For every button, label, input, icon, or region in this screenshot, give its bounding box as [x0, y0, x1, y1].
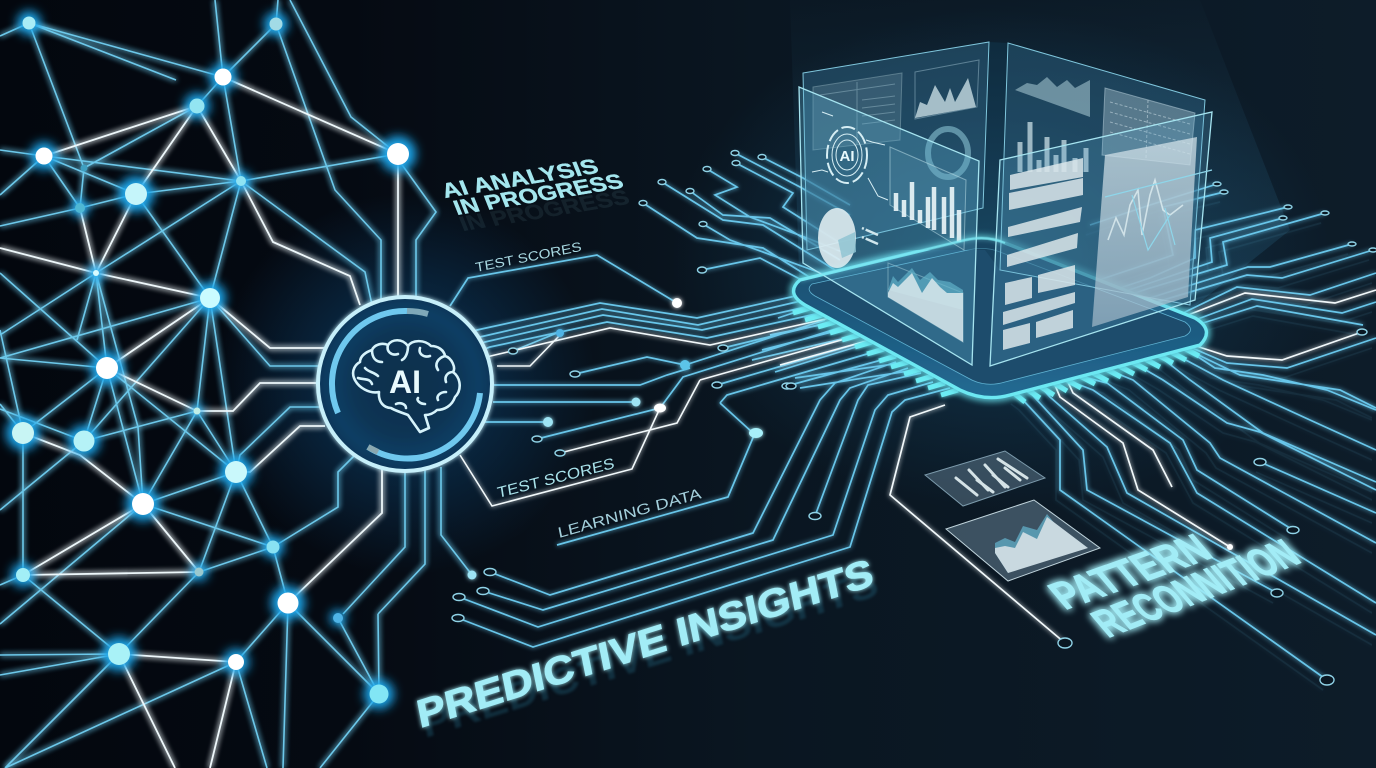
- label: predictive insights: [413, 551, 882, 747]
- lower area chart: [888, 263, 963, 342]
- network node halos: [6, 11, 416, 709]
- hub glow: [215, 194, 595, 574]
- left bundle white traces: [460, 318, 870, 506]
- label: test scores upper: TEST SCORES: [474, 239, 583, 275]
- central chip: [793, 238, 1206, 402]
- bar chart board: [925, 451, 1045, 506]
- AI brain hub: [318, 297, 492, 471]
- predictive insights glow text: PREDICTIVE INSIGHTS: [413, 551, 877, 737]
- pattern word: PATTERN: [1039, 526, 1221, 618]
- network nodes: [12, 16, 409, 704]
- AI gauge: [812, 112, 888, 200]
- gauge AI label: AI: [840, 148, 854, 165]
- recognition word: RECONNITION: [1082, 531, 1309, 646]
- heading reflection: IN PROGRESS: [456, 186, 633, 236]
- area chart: [1015, 77, 1090, 117]
- left bundle traces: [448, 153, 950, 647]
- network edges white: [0, 77, 398, 768]
- brain icon: [353, 340, 460, 432]
- trace end dots: [468, 298, 1233, 580]
- large data block: [1092, 137, 1197, 327]
- label: pattern recognition: [1039, 526, 1309, 646]
- data table: [1102, 88, 1195, 165]
- label: learning data: LEARNING DATA: [556, 485, 703, 542]
- hub disc: [318, 297, 492, 471]
- bar chart: [1020, 122, 1086, 172]
- legend: [862, 228, 878, 244]
- area chart: [915, 60, 979, 119]
- label: test scores lower: TEST SCORES: [496, 455, 616, 502]
- right white traces: [890, 290, 1376, 643]
- hollow trace terminals: [452, 150, 1376, 685]
- area chart board: [946, 500, 1100, 581]
- back right panel: [1000, 43, 1205, 305]
- line chart: [1108, 180, 1183, 240]
- chip body: [794, 238, 1206, 398]
- chip glow: [670, 10, 1330, 510]
- hub AI label: AI: [389, 364, 421, 400]
- hologram panels: [799, 42, 1212, 366]
- front right panel: [990, 112, 1212, 366]
- donut chart: [928, 129, 968, 177]
- stacked bars: [1003, 158, 1083, 350]
- cube backdrop: [803, 42, 1205, 305]
- pie chart: [818, 208, 856, 268]
- heading line 1: AI ANALYSIS: [438, 155, 602, 203]
- right traces: [1015, 184, 1376, 680]
- network edges cyan: [0, 0, 472, 768]
- circuit traces: [448, 150, 1376, 690]
- chip pins: [793, 308, 1199, 402]
- chip inner bevel: [809, 248, 1190, 384]
- label: AI analysis in progress: [438, 155, 633, 236]
- back left panel: [803, 42, 989, 250]
- heading line 2: IN PROGRESS: [450, 170, 627, 220]
- small floating chart boards: [925, 451, 1100, 581]
- front left panel: [799, 87, 979, 365]
- data table: [813, 73, 902, 150]
- trace reflections: [1011, 194, 1372, 690]
- hub progress arcs: [332, 311, 480, 459]
- light cone behind panels: [790, 0, 1290, 310]
- neural network: [0, 0, 472, 768]
- chip front edge highlight over panels: [800, 238, 1005, 280]
- predictive insights shadow: PREDICTIVE INSIGHTS: [418, 561, 882, 747]
- bar chart: [890, 147, 966, 250]
